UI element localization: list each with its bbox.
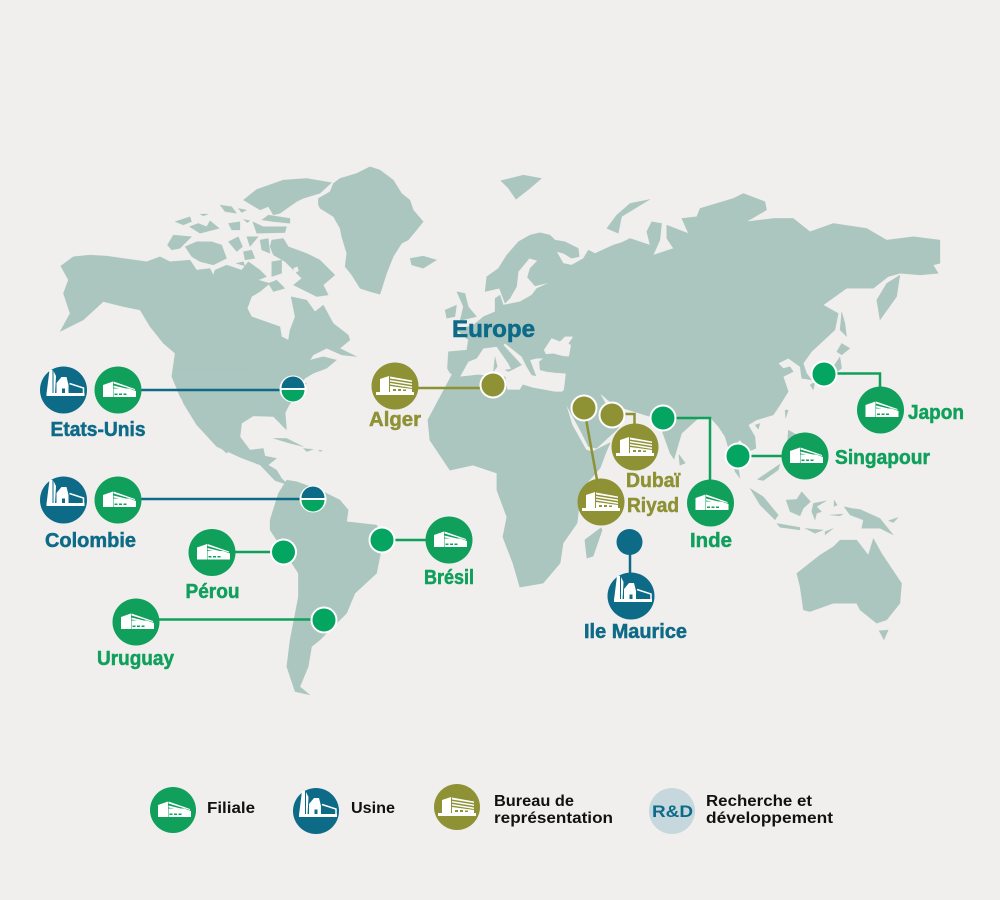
map: Kamchatka xyxy=(877,275,900,320)
map: Africa xyxy=(428,373,610,587)
map: Ellesmere xyxy=(243,178,332,215)
map: North America xyxy=(60,167,437,453)
map: Japan and Sakhalin xyxy=(810,312,850,390)
site: Brésil: Brésil xyxy=(424,567,474,589)
site: Riyad xyxy=(572,396,679,526)
site: Pérou xyxy=(186,529,296,603)
site: Singapour: Singapour xyxy=(835,447,930,469)
legend: Recherche et développement: Recherche et xyxy=(706,793,812,810)
site: Brésil xyxy=(370,516,474,589)
site: Japon: Japon xyxy=(908,402,964,424)
legend: Recherche et développement: R&D xyxy=(652,802,693,821)
site: Inde xyxy=(650,406,734,552)
site: Riyad: Riyad xyxy=(627,495,679,517)
world map xyxy=(60,167,940,695)
map: Europe xyxy=(445,233,643,377)
site: Inde: Inde xyxy=(690,530,732,552)
map: Iceland xyxy=(410,256,437,268)
site: Pérou: Pérou xyxy=(186,581,240,603)
site: Uruguay: Uruguay xyxy=(97,648,175,670)
map: Sri Lanka xyxy=(679,455,685,465)
map: Canadian Arctic islands xyxy=(167,205,335,297)
site: Dubaï: Dubaï xyxy=(626,470,680,492)
map: Novaya Zemlya xyxy=(607,199,650,233)
map: Taiwan and Hainan xyxy=(755,410,788,429)
legend: Filiale xyxy=(150,787,255,833)
map: Greenland xyxy=(318,167,423,294)
site: Ile Maurice: Ile Maurice xyxy=(584,621,687,643)
legend: Bureau de représentation: Bureau de xyxy=(494,793,574,810)
map: Arabia xyxy=(560,373,626,448)
legend: Usine: Usine xyxy=(351,800,395,817)
map: Asia xyxy=(501,175,940,478)
site: Etats-Unis: Etats-Unis xyxy=(50,419,146,441)
site: Colombie: Colombie xyxy=(45,530,136,552)
site: Etats-Unis xyxy=(40,366,306,441)
map: Southeast Asia and Oceania xyxy=(750,430,902,640)
legend: Bureau de représentation xyxy=(434,784,613,830)
map: British Isles xyxy=(445,292,477,321)
legend: Bureau de représentation: représentation xyxy=(494,810,613,827)
label: Europe: Europe xyxy=(452,316,535,343)
map: Australia xyxy=(797,538,902,623)
legend: Recherche et développement xyxy=(649,788,833,834)
site: Alger xyxy=(369,362,506,431)
map: Mexico, Central America and Caribbean xyxy=(173,370,323,485)
map: Madagascar xyxy=(585,528,602,558)
legend: Recherche et développement: développement xyxy=(706,810,833,827)
legend: Usine xyxy=(293,788,395,834)
site: Japon xyxy=(812,362,964,434)
legend xyxy=(150,784,833,834)
site: Ile Maurice xyxy=(584,529,687,643)
site: Singapour xyxy=(726,432,930,480)
site: Alger: Alger xyxy=(369,409,421,431)
map: South America xyxy=(270,480,383,695)
legend: Filiale: Filiale xyxy=(207,800,255,817)
map: Mediterranean islands xyxy=(493,357,515,372)
site: Dubaï xyxy=(600,402,680,492)
site: Colombie xyxy=(40,476,326,552)
site: Uruguay xyxy=(97,598,336,670)
map: Tasmania xyxy=(879,630,888,640)
map: Svalbard xyxy=(501,175,542,199)
